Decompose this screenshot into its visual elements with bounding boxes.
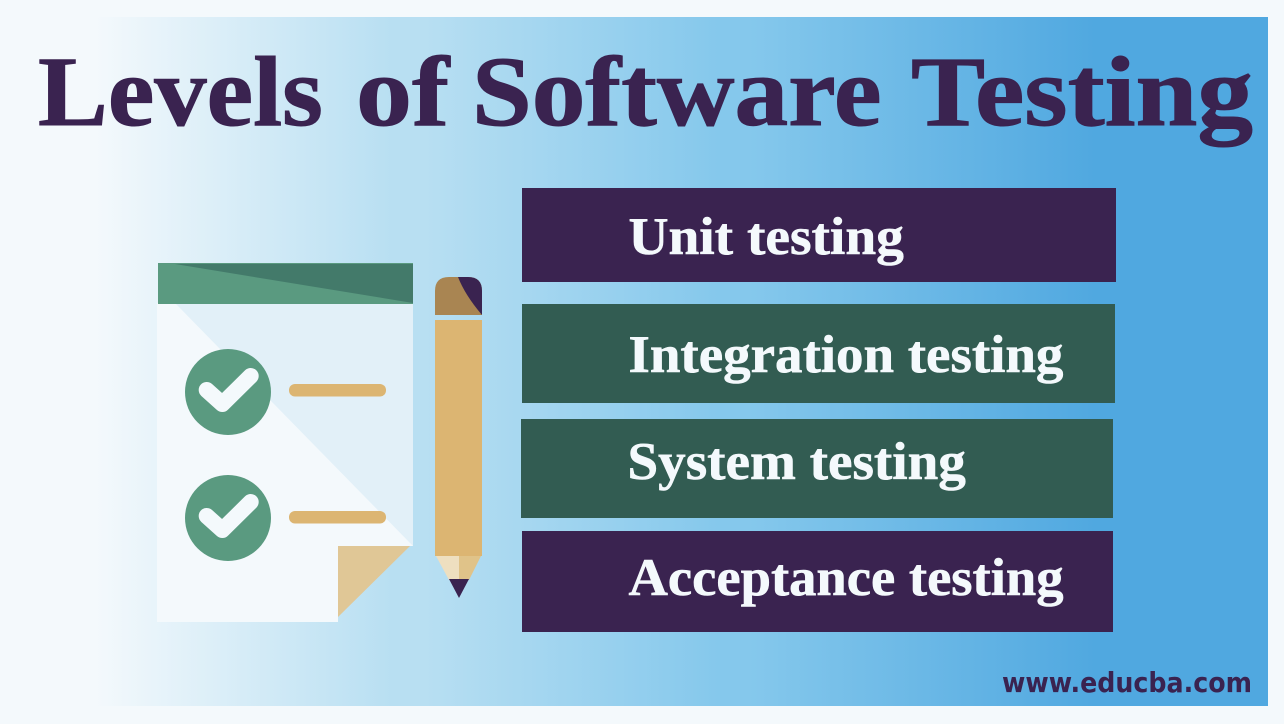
icon: check circle 1 <box>185 349 271 435</box>
icon: checklist paper <box>157 263 413 622</box>
bar: unit testing: Unit testing <box>628 207 904 266</box>
bar: unit testing <box>522 188 1116 282</box>
icon: pencil <box>435 277 482 598</box>
title: Software <box>472 37 882 147</box>
bar: acceptance testing: Acceptance testing <box>628 548 1064 607</box>
website url: www.educba.com <box>1002 666 1252 699</box>
title: of <box>356 36 451 147</box>
checklist line 2 <box>289 511 386 524</box>
bar: integration testing <box>522 304 1115 403</box>
bar: integration testing: Integration testing <box>628 325 1063 384</box>
title: Testing <box>911 36 1253 147</box>
icon: check circle 2 <box>185 475 271 561</box>
title <box>38 36 1253 147</box>
title: Levels <box>38 37 323 147</box>
bar: system testing: System testing <box>628 432 966 491</box>
bar: acceptance testing <box>522 531 1113 632</box>
checklist line 1 <box>289 384 386 396</box>
bar: system testing <box>521 419 1113 518</box>
